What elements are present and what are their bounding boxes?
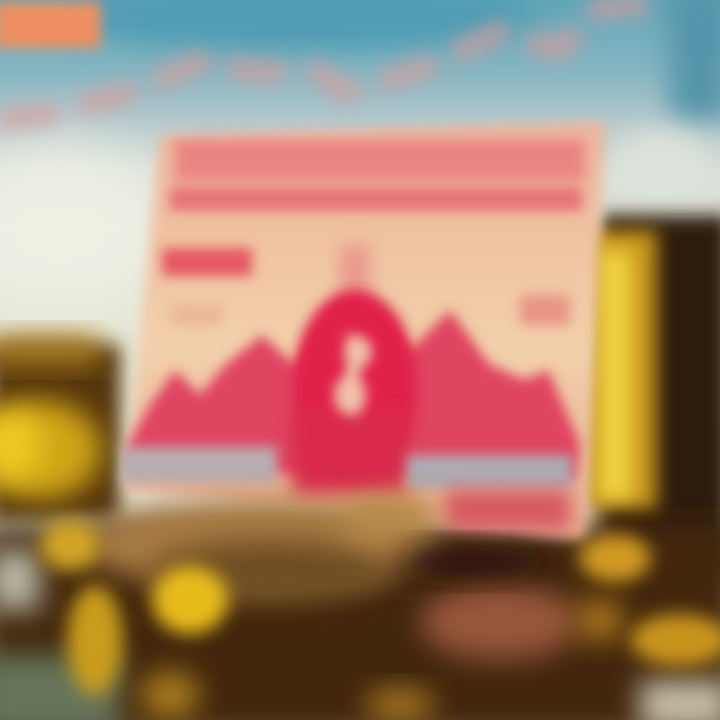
red dollar circle	[293, 290, 417, 480]
chart line in sky	[0, 5, 650, 120]
gold stack: right	[585, 215, 720, 575]
foreground dark base	[0, 525, 720, 720]
gold coins: left stack	[0, 335, 120, 520]
exchange poster card	[122, 122, 605, 540]
grey bars	[122, 447, 277, 483]
dollar glyph	[334, 335, 372, 415]
poster heading blur	[170, 140, 585, 211]
orange label top left	[0, 2, 101, 48]
coins in foreground	[40, 494, 720, 720]
red mountain chart	[128, 300, 580, 480]
poster small label	[162, 248, 252, 276]
